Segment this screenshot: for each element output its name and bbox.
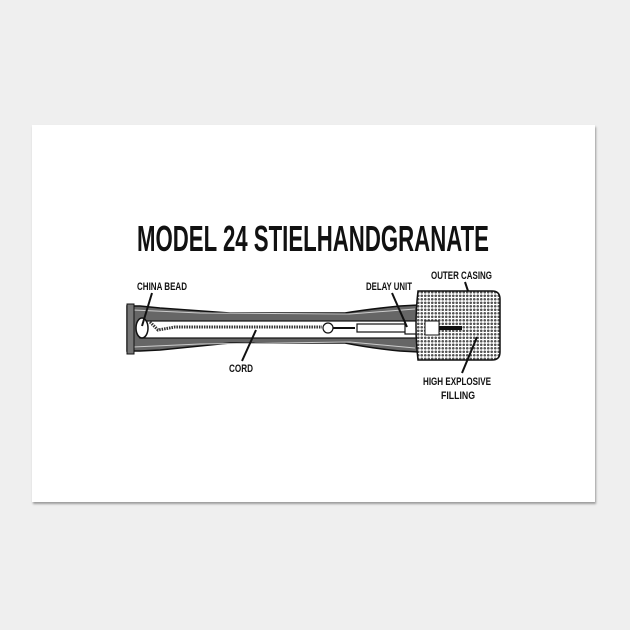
channel <box>140 321 416 338</box>
label: high explosive filling: HIGH EXPLOSIVE <box>423 376 491 388</box>
head <box>416 291 500 360</box>
label: high explosive filling: FILLING <box>441 390 475 402</box>
label: delay unit: DELAY UNIT <box>366 281 412 293</box>
label: outer casing <box>431 270 492 291</box>
label: china bead: CHINA BEAD <box>137 281 187 293</box>
label: cord <box>229 330 256 375</box>
label: china bead <box>137 281 187 326</box>
delay unit <box>357 324 407 332</box>
label: outer casing: OUTER CASING <box>431 270 492 282</box>
cord <box>150 322 322 330</box>
handle <box>127 304 425 354</box>
grenade diagram <box>127 291 500 360</box>
label: cord: CORD <box>229 363 253 375</box>
china bead <box>136 318 148 338</box>
label: delay unit <box>366 281 412 327</box>
poster card <box>32 125 595 502</box>
label: high explosive filling <box>423 337 491 402</box>
